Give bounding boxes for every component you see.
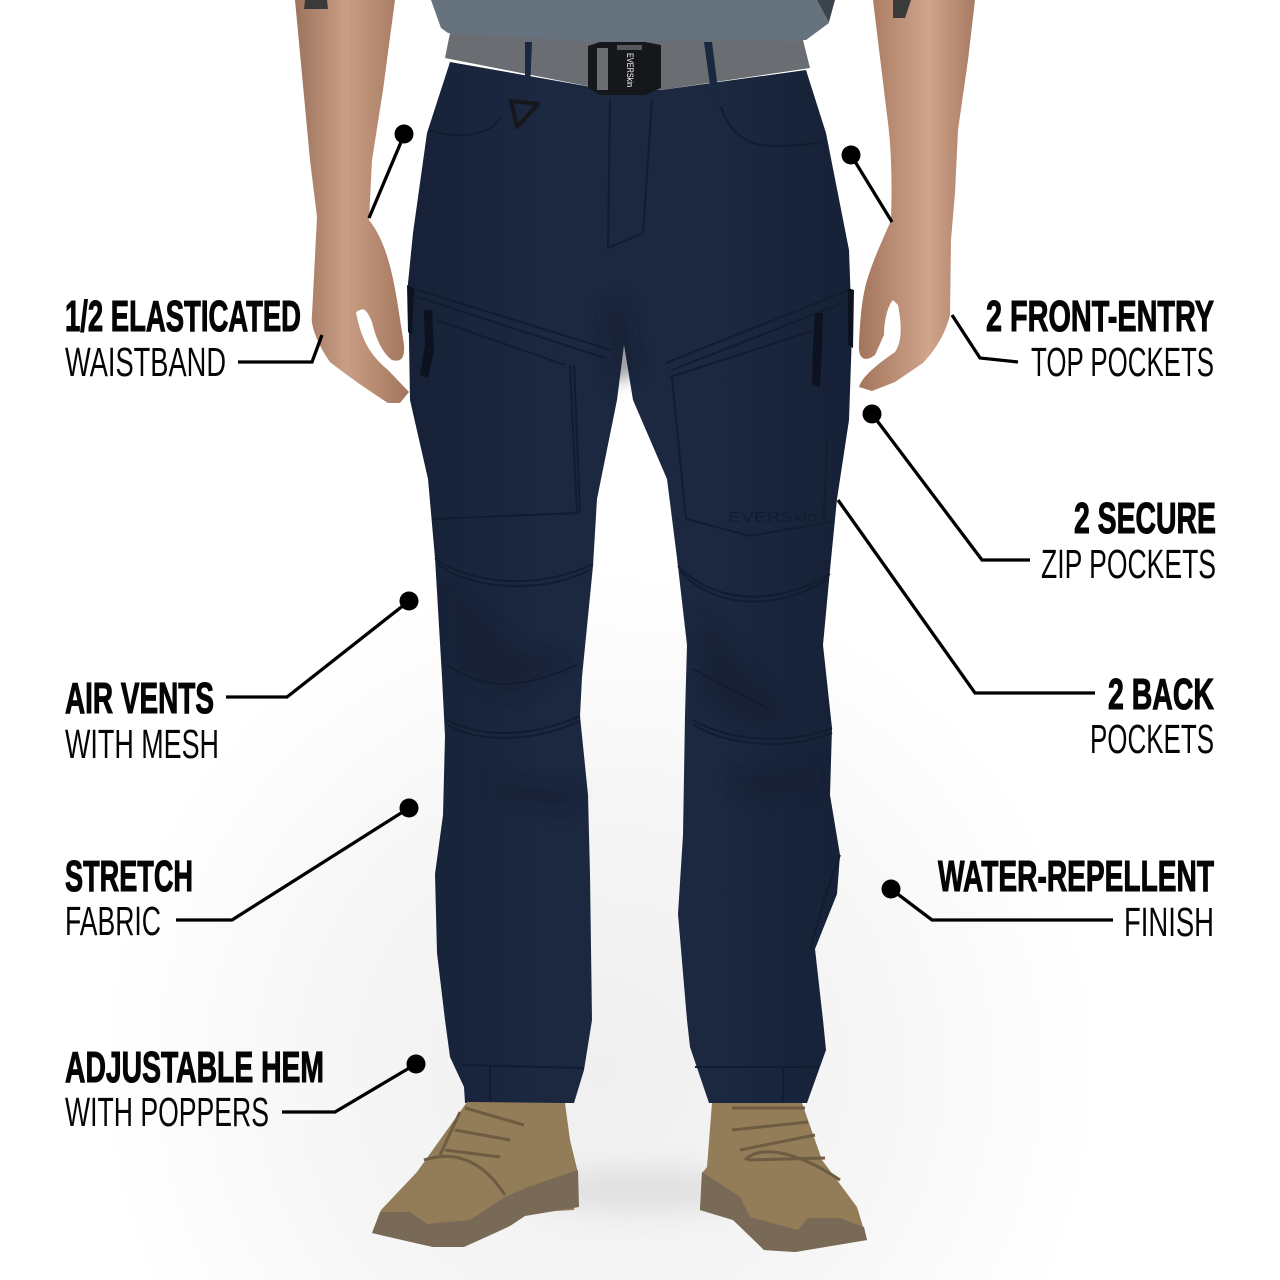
pocket and seam details [408,100,849,1102]
left boot sole [372,1170,579,1247]
belt [445,33,810,90]
tattoos [304,0,911,18]
callout: 2 front-entry top pockets [842,146,1214,385]
callout: water-repellent finish: FINISH [1124,899,1214,945]
callout: water-repellent finish [882,852,1214,945]
callout: stretch fabric [65,798,418,944]
callout: air vents with mesh [65,592,418,767]
belt loops [525,42,720,107]
left arm and hand [295,0,409,403]
belt ring [511,101,538,127]
shirt dark sleeve edge [817,0,835,22]
callout: adjustable hem with poppers [65,1043,426,1135]
callout: adjustable hem with poppers: ADJUSTABLE HEM [65,1043,324,1092]
zipper pulls [407,285,854,387]
right boot laces [732,1108,840,1180]
right boot [700,1103,867,1252]
left boot [372,1102,579,1247]
callout: air vents with mesh: WITH MESH [65,721,219,767]
ground shadow under boots [530,1168,750,1212]
callout: stretch fabric: FABRIC [65,898,161,944]
floor shadow [0,560,1280,1280]
callout: 1/2 elasticated waistband: 1/2 ELASTICATED [65,292,301,341]
belt buckle: EVERSkin [625,53,635,87]
right boot sole [700,1172,867,1252]
callout: 2 secure zip pockets [862,404,1216,587]
callout: 1/2 elasticated waistband: WAISTBAND [65,339,226,385]
callout: 2 back pockets: 2 BACK [1108,670,1214,719]
callout: 2 back pockets [838,500,1214,762]
callout: stretch fabric: STRETCH [65,852,193,901]
figure: man wearing trousers [295,0,975,1252]
callout: 1/2 elasticated waistband [65,124,414,385]
right arm and hand [859,0,975,391]
belt buckle [588,42,661,95]
fabric shading [450,300,820,810]
trousers [408,62,852,1103]
left boot laces [424,1108,524,1195]
callout: adjustable hem with poppers: WITH POPPERS [65,1089,269,1135]
callout: air vents with mesh: AIR VENTS [65,674,214,723]
embossed logo: EVERSkin [728,509,818,526]
shirt [431,0,829,44]
